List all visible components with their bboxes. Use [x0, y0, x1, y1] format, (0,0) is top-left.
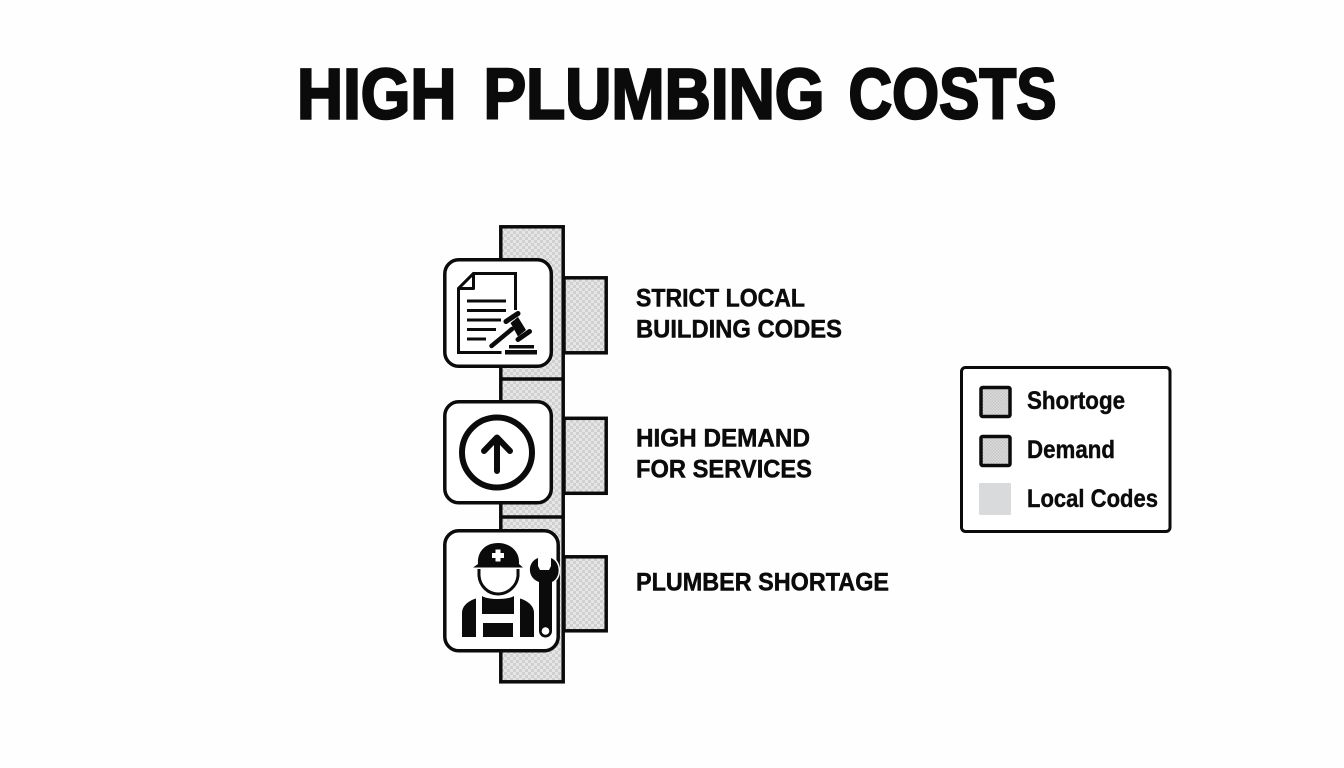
icon: legal document with gavel [445, 260, 551, 366]
title: PLUMBING [484, 56, 824, 134]
legend item: demand [981, 436, 1115, 466]
legend item: demand: Demand [1027, 436, 1115, 464]
label: high demand for services: HIGH DEMAND [636, 424, 810, 452]
central stacked column [501, 227, 563, 682]
title: COSTS [848, 56, 1056, 134]
legend item: shortage [981, 387, 1125, 416]
legend item: shortage: Shortoge [1027, 387, 1125, 415]
label: high demand for services: FOR SERVICES [636, 456, 812, 484]
side tab: shortage [564, 557, 606, 631]
legend [962, 368, 1170, 532]
label: strict local building codes: BUILDING CODES [636, 316, 842, 344]
label: high demand for services [636, 424, 812, 484]
side tab: demand [564, 418, 606, 493]
label: plumber shortage: PLUMBER SHORTAGE [636, 568, 889, 596]
side tab: local codes [564, 278, 606, 353]
label: strict local building codes: STRICT LOCAL [636, 284, 805, 312]
icon: plumber with wrench [445, 531, 559, 651]
legend item: local codes [979, 483, 1158, 515]
title [297, 56, 1056, 134]
legend item: local codes: Local Codes [1027, 485, 1158, 513]
diagram: cost factors column [445, 227, 606, 682]
label: strict local building codes [636, 284, 842, 344]
title: HIGH [297, 56, 456, 134]
icon: up arrow in circle [445, 402, 551, 503]
